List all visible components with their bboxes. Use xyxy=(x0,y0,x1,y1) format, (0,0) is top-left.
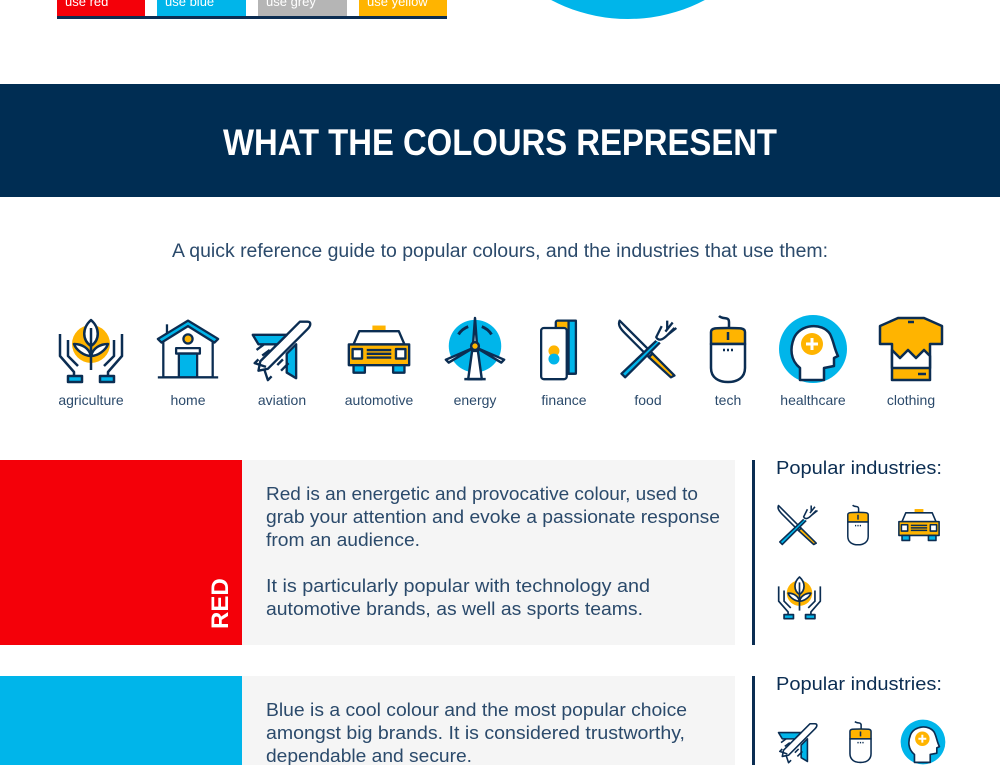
icon: home: home xyxy=(170,392,206,408)
text: red description: grab your attention and evoke a passionate response xyxy=(266,506,720,527)
icon: clothing xyxy=(880,318,942,408)
top colour legend strip xyxy=(57,0,447,19)
icon: healthcare: healthcare xyxy=(780,392,846,408)
icon: agriculture: agriculture xyxy=(58,392,124,408)
subtitle: A quick reference guide to popular colours, and the industries that use them: xyxy=(172,241,828,262)
text: red description: from an audience. xyxy=(266,529,420,550)
text: red description: It is particularly popular with technology and xyxy=(266,575,650,596)
icon: home xyxy=(158,321,218,408)
icon: food: food xyxy=(634,392,662,408)
icon: automotive: automotive xyxy=(345,392,413,408)
icon: finance: finance xyxy=(541,392,587,408)
panel: red: RED xyxy=(207,578,234,629)
text: blue description: amongst big brands. It is considered trustworthy, xyxy=(266,722,685,743)
icon: food xyxy=(619,321,676,408)
blue circle xyxy=(463,0,793,19)
icon: automotive xyxy=(345,326,413,408)
icon: energy: energy xyxy=(454,392,496,408)
text: red description: Red is an energetic and provocative colour, used to xyxy=(266,483,698,504)
icon row xyxy=(58,315,942,408)
panel: blue xyxy=(0,673,945,765)
icon: clothing: clothing xyxy=(887,392,935,408)
blue popular industries xyxy=(776,673,945,764)
icon: agriculture xyxy=(58,320,124,408)
icon: aviation: aviation xyxy=(258,392,306,408)
icon: tech: tech xyxy=(715,392,741,408)
red popular industries: Popular industries: xyxy=(776,457,942,478)
icon: finance xyxy=(541,321,587,408)
text: red description xyxy=(266,483,720,619)
text: blue description xyxy=(266,699,687,765)
title banner: WHAT THE COLOURS REPRESENT xyxy=(223,122,777,163)
red popular industries xyxy=(776,457,942,619)
icon: energy xyxy=(446,318,504,408)
icon: tech xyxy=(711,316,745,408)
blue popular industries: Popular industries: xyxy=(776,673,942,694)
icon: healthcare xyxy=(779,315,847,408)
text: blue description: Blue is a cool colour and the most popular choice xyxy=(266,699,687,720)
panel: red xyxy=(0,457,942,645)
title banner xyxy=(0,84,1000,197)
text: red description: automotive brands, as well as sports teams. xyxy=(266,598,643,619)
icon: aviation xyxy=(253,322,310,408)
